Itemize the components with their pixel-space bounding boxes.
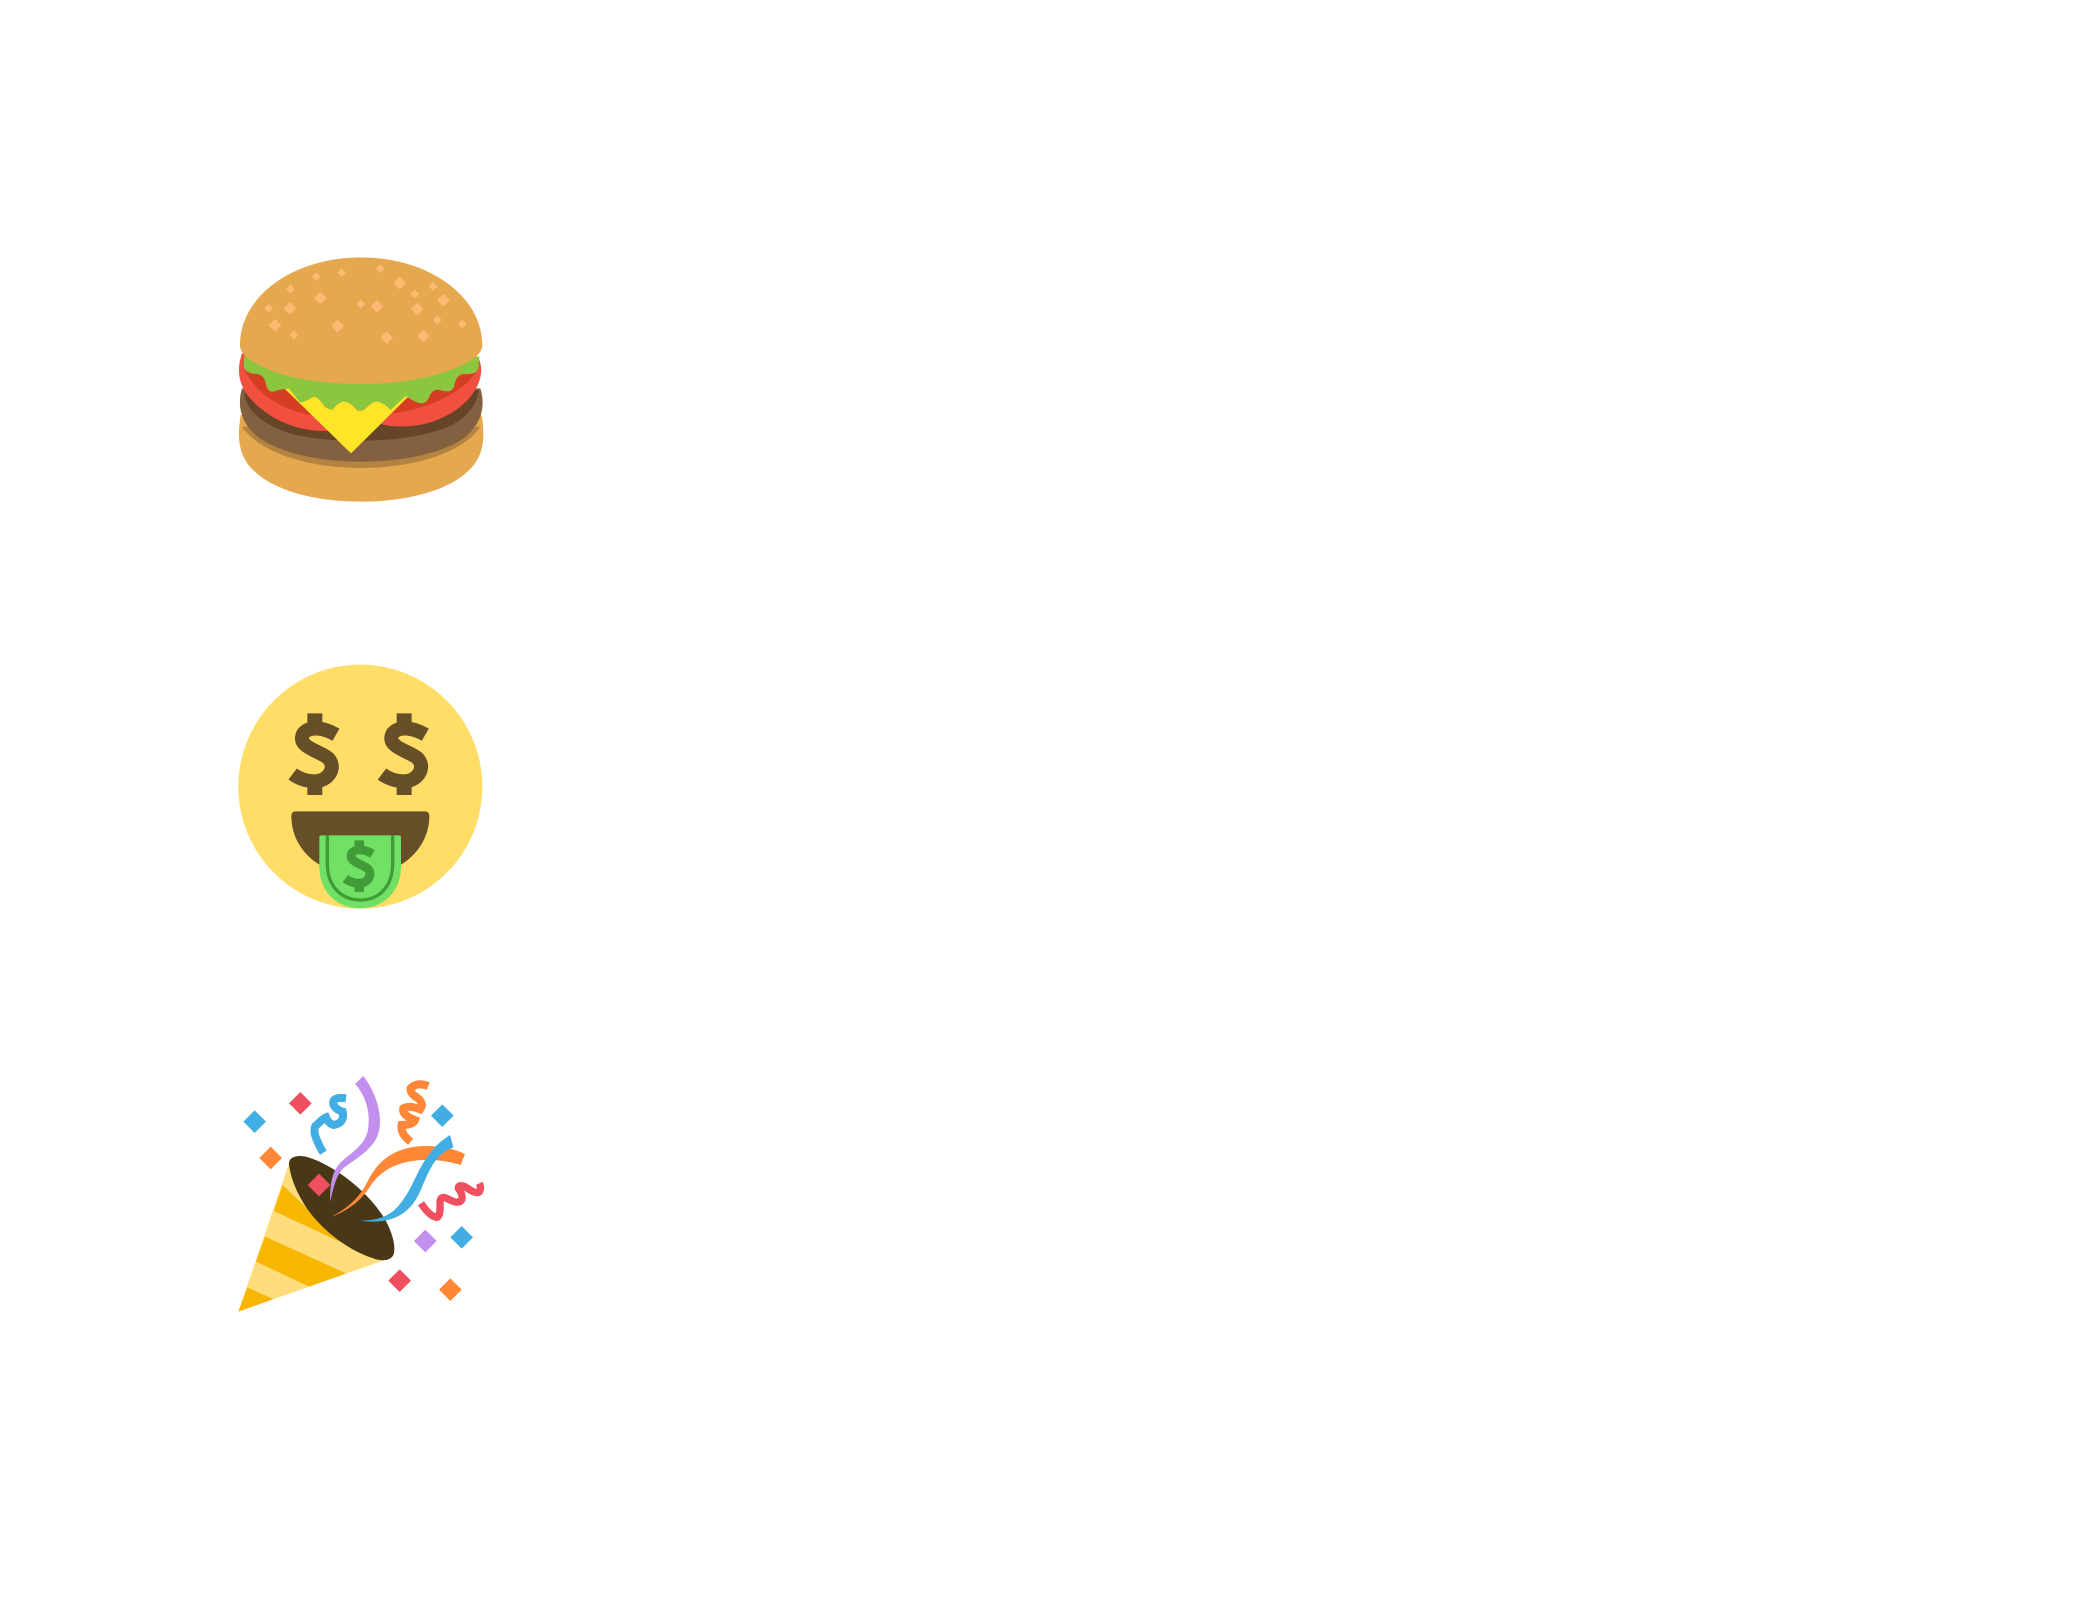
left dollar eye [293, 713, 336, 795]
confetti [243, 1092, 473, 1301]
streamers [314, 1076, 480, 1222]
cone opening [289, 1156, 394, 1260]
icon: money-mouth face [238, 665, 482, 909]
tongue banknote [319, 835, 401, 908]
face [238, 665, 482, 909]
mouth [291, 811, 429, 872]
icon: party popper [238, 1076, 480, 1312]
right dollar eye [382, 713, 425, 795]
cone [238, 1163, 385, 1312]
icon: hamburger [239, 257, 483, 502]
